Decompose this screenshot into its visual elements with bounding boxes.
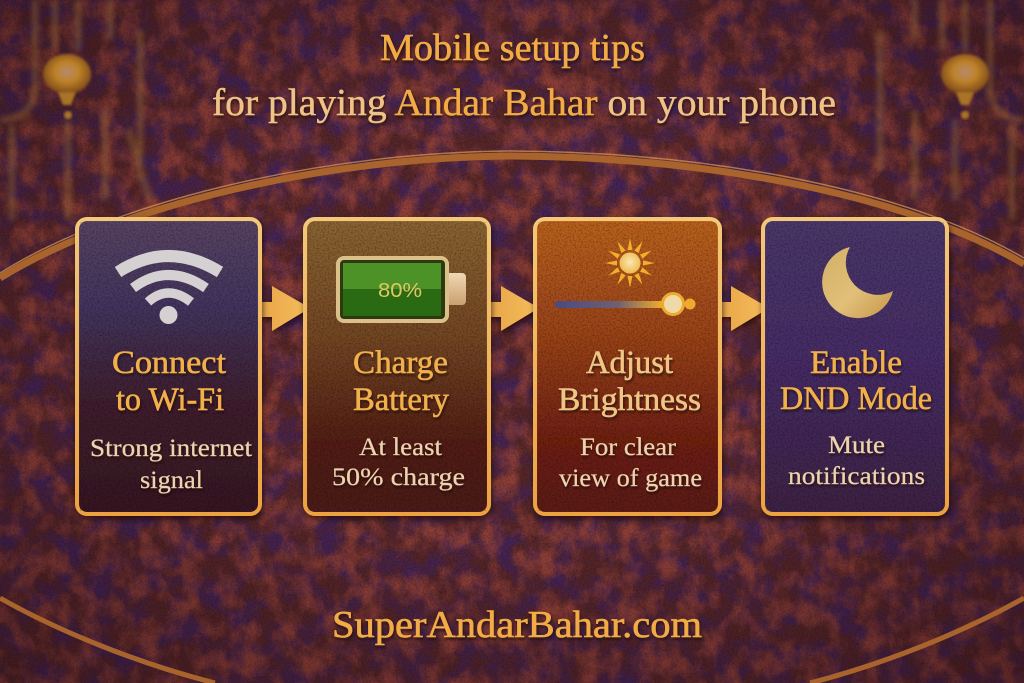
panel: enable dnd mode bbox=[763, 219, 947, 514]
icon: wifi bbox=[118, 256, 220, 324]
heading: Brightness bbox=[558, 382, 701, 418]
arrow: step 2 to 3 bbox=[488, 286, 539, 331]
description bbox=[90, 435, 252, 494]
heading: Charge bbox=[353, 345, 448, 381]
description: Strong internet bbox=[90, 435, 252, 462]
title: for playing Andar Bahar on your phone bbox=[212, 82, 836, 124]
panel: charge battery bbox=[305, 219, 489, 514]
description: For clear bbox=[580, 434, 677, 461]
heading: Battery bbox=[353, 382, 449, 418]
panel: connect to wi-fi bbox=[77, 219, 260, 514]
description: signal bbox=[140, 467, 203, 494]
description bbox=[332, 434, 465, 491]
heading: Adjust bbox=[586, 345, 673, 381]
heading bbox=[353, 345, 449, 418]
lantern: left bbox=[43, 54, 91, 119]
description: Mute bbox=[828, 432, 885, 459]
heading: to Wi-Fi bbox=[116, 382, 224, 418]
arrow: step 3 to 4 bbox=[718, 286, 769, 331]
heading bbox=[112, 345, 226, 418]
description: At least bbox=[359, 434, 442, 461]
description: view of game bbox=[559, 465, 702, 492]
hanging ornaments bbox=[0, 0, 1024, 220]
heading bbox=[558, 345, 701, 418]
icon: brightness slider bbox=[555, 294, 696, 314]
icon: battery bbox=[338, 258, 466, 321]
description bbox=[559, 434, 702, 492]
description: notifications bbox=[788, 463, 925, 490]
icon: crescent moon bbox=[822, 247, 893, 318]
title bbox=[212, 27, 836, 124]
title: Mobile setup tips bbox=[380, 27, 645, 69]
description: 50% charge bbox=[332, 464, 465, 491]
lantern: right bbox=[941, 54, 989, 119]
table ring bbox=[0, 151, 1024, 683]
heading bbox=[780, 345, 932, 417]
icon: sun bbox=[605, 238, 655, 288]
arrow: step 1 to 2 bbox=[258, 286, 310, 331]
description bbox=[788, 432, 925, 490]
footer website: SuperAndarBahar.com bbox=[332, 604, 702, 646]
icon: battery: 80% bbox=[378, 280, 422, 302]
heading: Connect bbox=[112, 345, 226, 381]
heading: DND Mode bbox=[780, 381, 932, 417]
heading: Enable bbox=[810, 345, 902, 381]
panel: adjust brightness bbox=[535, 219, 720, 514]
